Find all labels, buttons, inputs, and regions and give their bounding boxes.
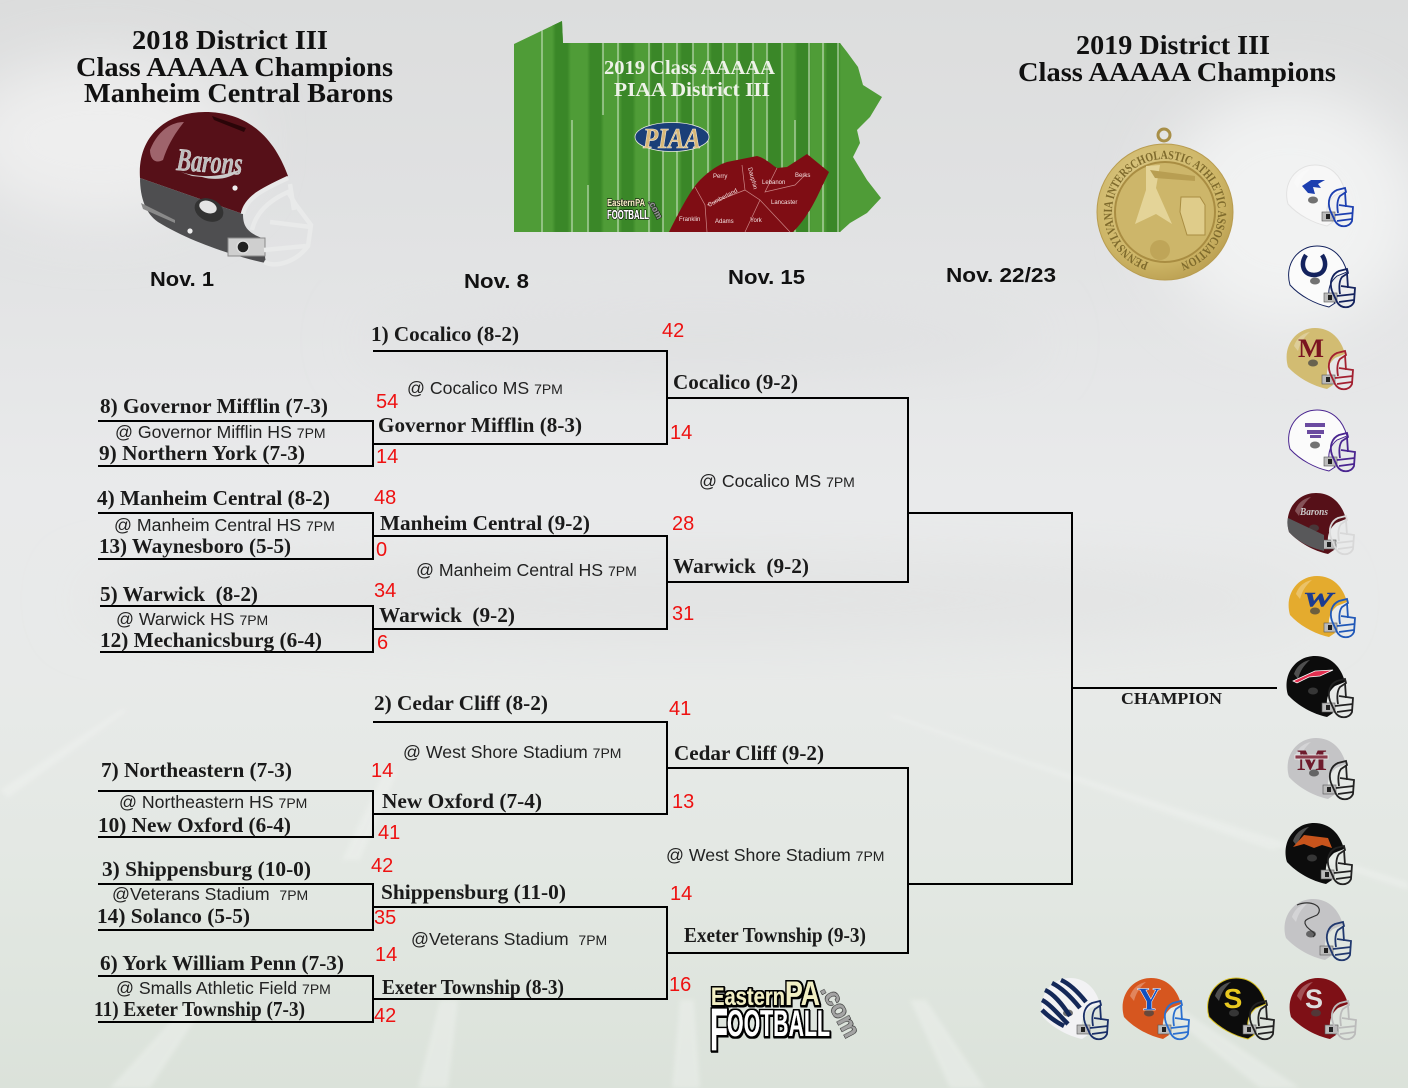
- icon: PIAA logo: PIAA: [642, 123, 701, 155]
- round dates: Nov. 15: [728, 267, 805, 289]
- icon: Barons small helmet: [1287, 493, 1354, 554]
- icon: orange Y helmet: [1123, 978, 1189, 1039]
- game venues: @ Warwick HS 7PM: [116, 609, 268, 629]
- logo: EasternPA Football.com: F: [710, 996, 728, 1063]
- game venues: [112, 378, 884, 998]
- game venues: @ Smalls Athletic Field 7PM: [116, 978, 331, 998]
- game scores: 14: [376, 446, 398, 468]
- round dates: Nov. 1: [150, 269, 214, 291]
- map: Pennsylvania football field: Cumberland: [707, 188, 739, 209]
- bracket: top half teams: 1) Cocalico (8-2): [371, 322, 519, 346]
- game scores: [371, 320, 694, 1027]
- bracket: bottom half teams: Exeter Township (8-3): [382, 975, 564, 999]
- icon: white and blue helmet: [1287, 165, 1353, 226]
- icon: gold W helmet: [1289, 576, 1355, 637]
- icon: silver and navy helmet: [1285, 899, 1351, 960]
- icon: small Eastern PA Football logo: .com: [646, 198, 664, 221]
- game scores: 14: [670, 422, 692, 444]
- bracket: bottom half teams: 6) York William Penn (7-3): [100, 951, 344, 975]
- icon: gold W helmet: W: [1303, 589, 1335, 611]
- icon: black and yellow S helmet: [1208, 978, 1274, 1039]
- bracket: top half teams: 13) Waynesboro (5-5): [99, 534, 291, 558]
- game scores: 14: [375, 944, 397, 966]
- game scores: 14: [371, 760, 393, 782]
- icon: PIAA gold medal: PENNSYLVANIA INTERSCHOLASTIC ATHLETIC ASSOCIATION: [1104, 150, 1226, 270]
- game scores: 34: [374, 580, 396, 602]
- round dates: Nov. 8: [464, 271, 529, 293]
- title: 2019 champions: 2019 District III: [1076, 30, 1270, 60]
- title: 2019 champions: [1018, 30, 1336, 87]
- game scores: 54: [376, 391, 398, 413]
- game venues: @ Cocalico MS 7PM: [699, 471, 855, 491]
- bracket: top half teams: [97, 322, 809, 652]
- game scores: 42: [374, 1005, 396, 1027]
- map: Pennsylvania football field: York: [750, 218, 763, 224]
- icon: black and yellow S helmet: S: [1224, 983, 1242, 1014]
- map: Pennsylvania football field: PIAA District III: [614, 79, 770, 101]
- bracket: bottom half teams: [94, 691, 866, 1021]
- game scores: 16: [669, 974, 691, 996]
- game scores: 6: [377, 632, 388, 654]
- bracket: top half teams: Manheim Central (9-2): [380, 511, 590, 535]
- icon: Manheim Central Barons helmet: Barons: [175, 141, 244, 182]
- map: Pennsylvania football field: Franklin: [679, 217, 700, 223]
- game scores: 48: [374, 487, 396, 509]
- bracket: top half teams: 4) Manheim Central (8-2): [97, 486, 330, 510]
- bracket: bottom half teams: 3) Shippensburg (10-0): [102, 857, 311, 881]
- logo: EasternPA Football.com: Eastern: [711, 983, 785, 1011]
- bracket: bottom half teams: 2) Cedar Cliff (8-2): [374, 691, 548, 715]
- game venues: @ Manheim Central HS 7PM: [114, 515, 335, 535]
- icon: gold M helmet: M: [1298, 334, 1324, 363]
- icon: silver M helmet: [1288, 738, 1354, 799]
- map: Pennsylvania football field: 2019 Class AAAAA: [604, 57, 776, 79]
- bracket: bottom half teams: Cedar Cliff (9-2): [674, 741, 824, 765]
- game venues: @ Governor Mifflin HS 7PM: [115, 422, 326, 442]
- game venues: @ Cocalico MS 7PM: [407, 378, 563, 398]
- game scores: 35: [374, 907, 396, 929]
- icon: maroon S helmet: [1290, 978, 1356, 1039]
- map: Pennsylvania football field: Adams: [715, 219, 734, 225]
- game scores: 0: [376, 539, 387, 561]
- map: Pennsylvania football field: Lancaster: [771, 200, 797, 206]
- champion label: CHAMPION: [1121, 689, 1223, 708]
- icon: white and purple helmet: [1289, 410, 1355, 471]
- bracket: top half teams: 12) Mechanicsburg (6-4): [100, 628, 322, 652]
- icon: black and red helmet: [1287, 656, 1353, 717]
- logo: EasternPA Football.com: OOTBALL: [727, 1003, 830, 1044]
- bracket: bottom half teams: New Oxford (7-4): [382, 789, 542, 813]
- game scores: 28: [672, 513, 694, 535]
- bracket: top half teams: Warwick (9-2): [379, 603, 515, 627]
- game scores: 41: [378, 822, 400, 844]
- map: Pennsylvania football field: Berks: [795, 173, 810, 179]
- icon: Manheim Central Barons helmet: [140, 112, 311, 264]
- bracket: bottom half teams: 10) New Oxford (6-4): [98, 813, 291, 837]
- map: Pennsylvania football field: [510, 15, 890, 235]
- game scores: 31: [672, 603, 694, 625]
- bracket: bottom half teams: 14) Solanco (5-5): [97, 904, 250, 928]
- game venues: @ Manheim Central HS 7PM: [416, 560, 637, 580]
- bracket: top half teams: Warwick (9-2): [673, 554, 809, 578]
- map: Pennsylvania football field: Dauphin: [746, 167, 758, 190]
- bracket: top half teams: 9) Northern York (7-3): [99, 441, 305, 465]
- title: 2018 champions: Manheim Central Barons: [84, 78, 393, 108]
- title: 2018 champions: [76, 25, 393, 108]
- title: 2018 champions: Class AAAAA Champions: [76, 52, 393, 82]
- bracket: bottom half teams: Exeter Township (9-3): [684, 923, 866, 947]
- bracket: top half teams: Governor Mifflin (8-3): [378, 413, 582, 437]
- game scores: 41: [669, 698, 691, 720]
- icon: gold M helmet: [1287, 328, 1353, 389]
- round dates: [150, 265, 1056, 293]
- game venues: @ Northeastern HS 7PM: [119, 792, 307, 812]
- game venues: @Veterans Stadium 7PM: [112, 884, 308, 904]
- logo: EasternPA Football.com: [710, 975, 866, 1063]
- icon: navy striped helmet: [1042, 978, 1108, 1039]
- game scores: 13: [672, 791, 694, 813]
- logo: EasternPA Football.com: PA: [785, 975, 820, 1013]
- icon: black and orange helmet: [1286, 823, 1352, 884]
- icon: silver M helmet: M: [1297, 744, 1327, 777]
- icon: small Eastern PA Football logo: EasternPA: [607, 198, 645, 209]
- icon: white horseshoe helmet: [1289, 246, 1355, 307]
- bracket lines: [98, 351, 1277, 1022]
- bracket: top half teams: 5) Warwick (8-2): [100, 582, 258, 606]
- icon: small Eastern PA Football logo: [607, 198, 664, 222]
- map: Pennsylvania football field: Lebanon: [762, 180, 785, 186]
- icon: orange Y helmet: Y: [1137, 982, 1161, 1018]
- game venues: @Veterans Stadium 7PM: [411, 929, 607, 949]
- game scores: 42: [371, 855, 393, 877]
- round dates: Nov. 22/23: [946, 265, 1056, 287]
- icon: Barons small helmet: Barons: [1299, 506, 1328, 518]
- title: 2018 champions: 2018 District III: [132, 25, 328, 55]
- icon: maroon S helmet: S: [1305, 984, 1323, 1014]
- game scores: 42: [662, 320, 684, 342]
- bracket: top half teams: 8) Governor Mifflin (7-3): [100, 394, 328, 418]
- icon: small Eastern PA Football logo: FOOTBALL: [607, 207, 649, 222]
- bracket: top half teams: Cocalico (9-2): [673, 370, 798, 394]
- bracket: bottom half teams: 7) Northeastern (7-3): [101, 758, 292, 782]
- title: 2019 champions: Class AAAAA Champions: [1018, 57, 1336, 87]
- bracket: bottom half teams: Shippensburg (11-0): [381, 880, 566, 904]
- bracket: bottom half teams: 11) Exeter Township (7-3): [94, 997, 305, 1021]
- game venues: @ West Shore Stadium 7PM: [666, 845, 884, 865]
- game venues: @ West Shore Stadium 7PM: [403, 742, 621, 762]
- District III counties: [669, 154, 829, 232]
- game scores: 14: [670, 883, 692, 905]
- map: Pennsylvania football field: Perry: [713, 174, 727, 180]
- logo: EasternPA Football.com: .com: [815, 980, 866, 1042]
